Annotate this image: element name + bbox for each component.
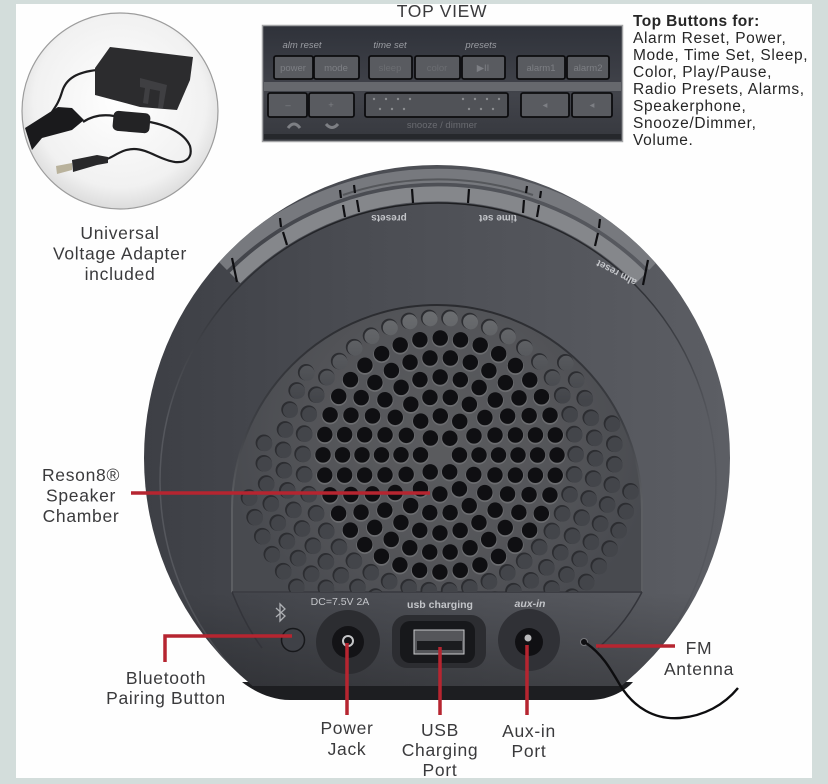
callout: usb charging port: [402, 647, 478, 780]
plug: [72, 155, 108, 172]
callout: speaker chamber: Reson8®: [42, 465, 120, 485]
antenna cable: [586, 643, 738, 718]
callout: aux-in port: [502, 645, 556, 761]
callout: speaker chamber: Chamber: [43, 506, 119, 526]
adapter caption: Universal: [80, 223, 160, 243]
printed button labels: time set: [478, 212, 517, 223]
button labels above: time set: [373, 40, 407, 51]
adapter body: [95, 47, 193, 110]
top buttons description: Snooze/Dimmer,: [633, 115, 757, 132]
top buttons description: Radio Presets, Alarms,: [633, 81, 805, 98]
adapter prongs: [140, 78, 167, 108]
upper button row: alarm2: [573, 63, 603, 74]
top buttons description: Color, Play/Pause,: [633, 64, 772, 81]
button labels above: [282, 40, 497, 51]
top view button panel: [262, 26, 622, 142]
adapter caption: Voltage Adapter: [53, 244, 187, 264]
upper button row: alarm1: [526, 63, 556, 74]
callout: speaker chamber: Speaker: [46, 486, 116, 506]
upper button row: sleep: [379, 63, 401, 74]
callout: power jack: Power: [320, 718, 374, 738]
printed button labels: presets: [371, 212, 407, 223]
callout: bluetooth pairing button: [106, 636, 292, 708]
top buttons description: Volume.: [633, 132, 694, 149]
upper button row: [274, 56, 609, 79]
icon: bluetooth: [276, 604, 285, 621]
button labels above: presets: [464, 40, 497, 51]
ferrite bead: [112, 110, 151, 134]
printed button labels: [371, 212, 639, 287]
lower button row: ◂: [590, 100, 595, 111]
adapter cable: [52, 70, 191, 162]
adapter photo circle: [22, 13, 218, 209]
callout: fm antenna: Antenna: [664, 659, 734, 679]
snooze dimmer label: snooze / dimmer: [407, 120, 477, 131]
lower button row: [268, 93, 612, 117]
callout: fm antenna: [596, 638, 734, 679]
callout: usb charging port: Port: [423, 760, 457, 780]
body shell: [144, 165, 730, 685]
button labels above: alm reset: [282, 40, 322, 51]
usb charging port: [392, 615, 486, 668]
upper button row: mode: [324, 63, 348, 74]
device rear view: [144, 165, 730, 700]
callout: bluetooth pairing button: Pairing Button: [106, 688, 226, 708]
icon: up and down arcs: [288, 124, 338, 128]
lower button row: ◂: [543, 100, 548, 111]
callout: usb charging port: Charging: [402, 740, 478, 760]
port labels: aux-in: [515, 598, 545, 610]
top buttons description: Mode, Time Set, Sleep,: [633, 47, 808, 64]
top view heading: TOP VIEW: [397, 1, 487, 21]
upper button row: power: [280, 63, 306, 74]
top button arcs: [222, 176, 654, 285]
lower port panel line: [232, 592, 642, 648]
speaker grille plate: [232, 305, 642, 592]
button gaps: [232, 185, 648, 285]
adapter caption: [53, 223, 187, 284]
port labels: [311, 596, 545, 611]
upper button row: color: [427, 63, 447, 74]
aux-in port: [498, 609, 560, 671]
top buttons description: [633, 13, 808, 149]
speaker holes: [240, 310, 638, 592]
callout: power jack: Jack: [328, 739, 366, 759]
top buttons description: Speakerphone,: [633, 98, 746, 115]
callout: aux-in port: Aux-in: [502, 721, 556, 741]
lower button row: +: [328, 100, 334, 111]
base: [242, 682, 633, 700]
callout: fm antenna: FM: [686, 638, 712, 658]
adapter caption: included: [85, 264, 155, 284]
plug tip: [56, 163, 72, 174]
lower body shading: [200, 623, 679, 686]
callout: aux-in port: Port: [512, 741, 546, 761]
printed button labels: alm reset: [594, 257, 639, 287]
bluetooth pairing button: [282, 628, 304, 652]
callout: bluetooth pairing button: Bluetooth: [126, 668, 206, 688]
front face: [159, 202, 708, 685]
callout: speaker chamber: [42, 465, 430, 526]
speakerphone dots: [373, 98, 500, 110]
upper button row: ▶II: [477, 63, 489, 74]
fm antenna hole: [580, 638, 588, 646]
port labels: DC=7.5V 2A: [311, 596, 369, 608]
port labels: usb charging: [407, 599, 473, 611]
lower button row: –: [285, 100, 291, 111]
callout: usb charging port: USB: [421, 720, 459, 740]
top buttons description: Top Buttons for:: [633, 13, 760, 30]
power jack: [316, 610, 380, 674]
coiled cord: [25, 107, 84, 150]
top buttons description: Alarm Reset, Power,: [633, 30, 786, 47]
callout: power jack: [320, 643, 374, 759]
